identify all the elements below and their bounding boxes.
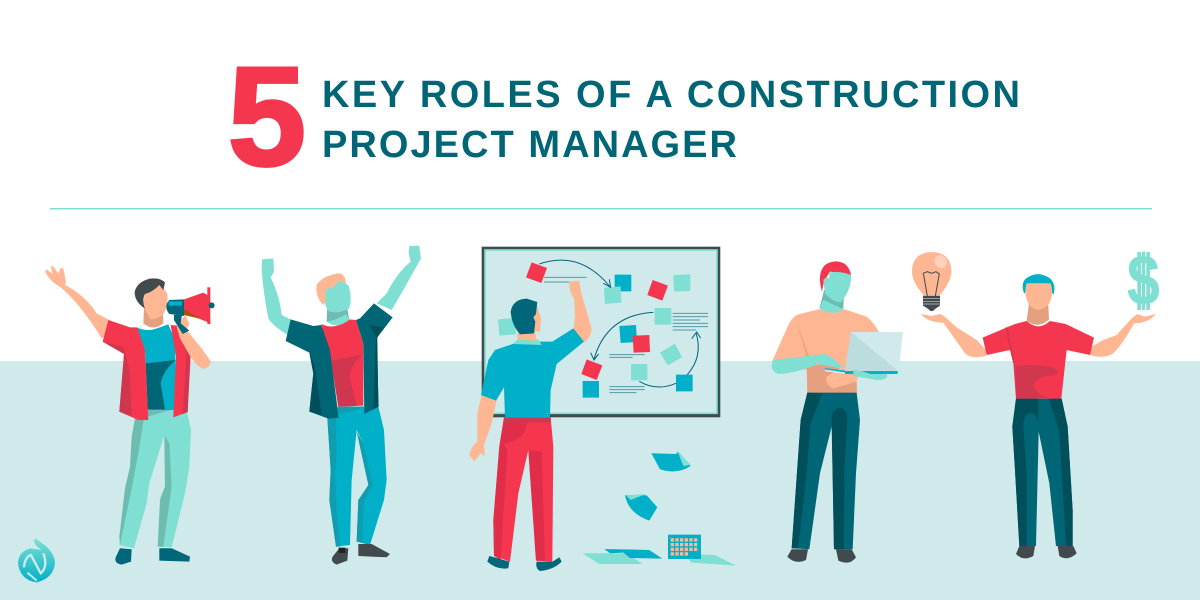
neck and head <box>1027 303 1049 325</box>
torso <box>772 309 879 393</box>
raised arm <box>569 281 592 342</box>
floating papers <box>651 452 691 471</box>
sticky notes <box>498 262 693 398</box>
shoes <box>487 556 562 571</box>
big number 5: 5 <box>228 37 306 195</box>
head <box>517 332 537 341</box>
arms <box>262 258 292 337</box>
neck and head <box>143 308 163 327</box>
arrows <box>539 260 701 387</box>
jacket <box>286 319 339 419</box>
arm <box>772 354 842 374</box>
title <box>228 37 1020 195</box>
figure: man with laptop <box>772 261 903 563</box>
tee <box>321 319 363 407</box>
neck and head <box>327 305 349 325</box>
figure: man cheering <box>262 246 421 565</box>
figure: man with megaphone <box>45 265 215 565</box>
figure: man balancing bulb and dollar <box>912 240 1160 558</box>
icon: dollar sign: $ <box>1127 240 1160 320</box>
calendar <box>668 535 701 559</box>
note lines <box>544 277 708 393</box>
legs <box>119 410 191 548</box>
tee <box>137 324 177 410</box>
heading text: KEY ROLES OF A CONSTRUCTION <box>322 74 1020 116</box>
logo <box>18 538 55 582</box>
trousers <box>493 417 553 562</box>
trousers <box>792 393 860 549</box>
shirt <box>481 328 584 418</box>
lower arm <box>469 395 497 462</box>
arms <box>921 314 986 357</box>
papers on floor <box>583 553 736 566</box>
figure: whiteboard and man <box>469 247 736 571</box>
neck and head <box>819 290 844 312</box>
legs <box>327 407 387 547</box>
laptop <box>845 332 903 371</box>
heading text: PROJECT MANAGER <box>322 124 737 166</box>
floor band <box>0 361 1200 600</box>
whiteboard <box>482 247 720 417</box>
jacket <box>103 320 148 420</box>
forearm <box>177 315 211 369</box>
megaphone <box>184 309 211 323</box>
heading text <box>322 74 1020 166</box>
shirt <box>983 321 1094 399</box>
icon: light bulb <box>912 252 951 311</box>
trousers <box>1012 399 1073 546</box>
